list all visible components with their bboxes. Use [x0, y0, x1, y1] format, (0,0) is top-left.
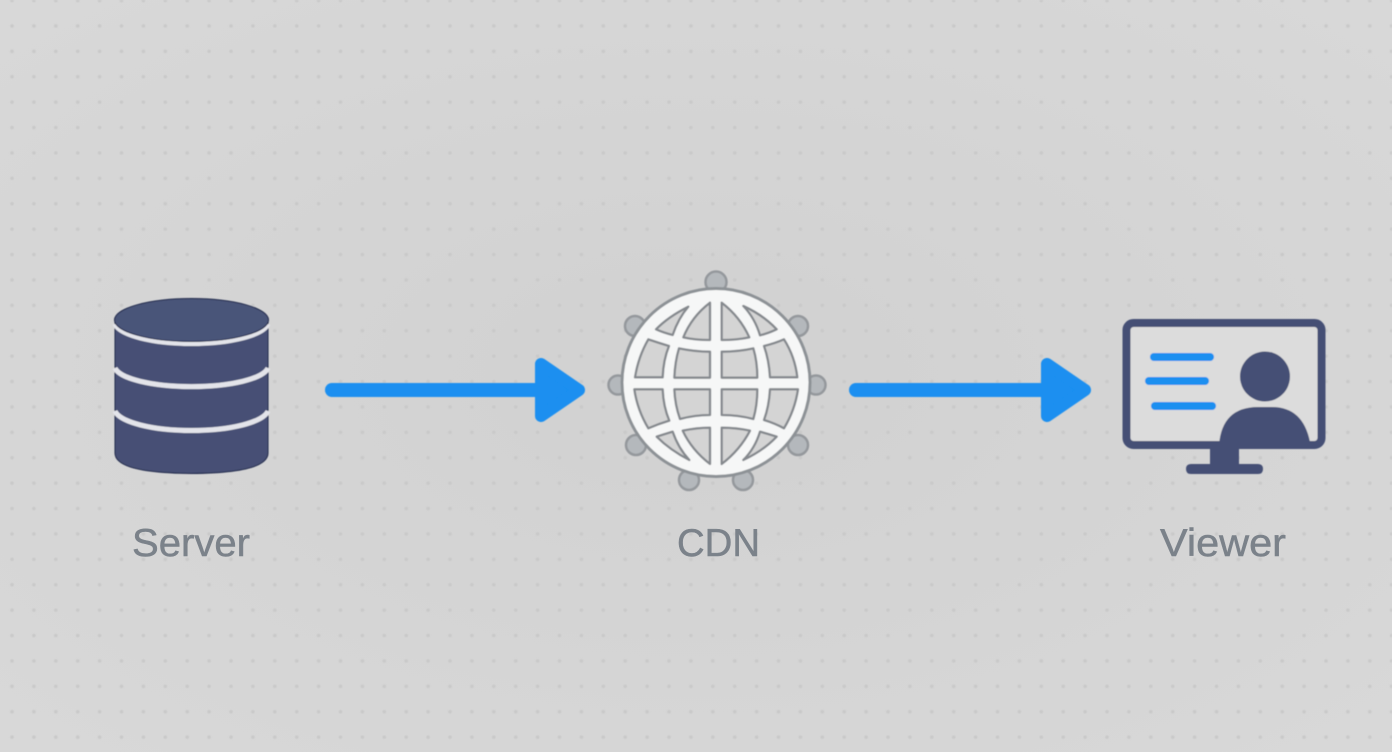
label: CDN: CDN: [677, 522, 760, 565]
monitor stand: [1186, 445, 1263, 474]
arrow: CDN to viewer: [856, 364, 1085, 416]
network nodes: [608, 272, 826, 490]
label: Server: Server: [132, 522, 250, 565]
icon: CDN globe: [608, 272, 826, 490]
content lines: [1149, 357, 1212, 406]
icon: server database: [114, 298, 268, 474]
viewer person: [1219, 352, 1310, 445]
label: Viewer: Viewer: [1160, 522, 1286, 565]
arrow: server to CDN: [332, 364, 579, 416]
monitor screen: [1126, 323, 1322, 445]
icon: viewer monitor: [1126, 323, 1322, 474]
